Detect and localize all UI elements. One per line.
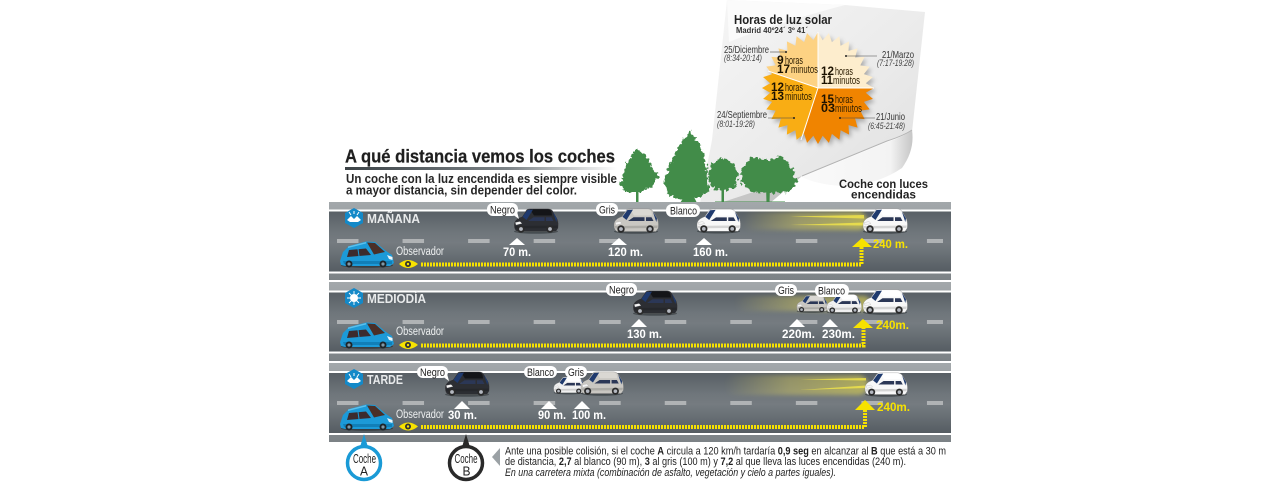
car: lights on: [863, 209, 908, 234]
label bubble: gris: Gris: [599, 204, 615, 216]
sector label: invierno 9 horas 17 minutos: 17: [777, 62, 790, 76]
sector label: invierno 9 horas 17 minutos: minutos: [791, 64, 818, 76]
label: observador: Observador: [396, 246, 444, 258]
marker 220 m: 220m.: [782, 327, 815, 341]
date label: 24 septiembre: 24/Septiembre: [717, 109, 767, 121]
text block: collision note: En una carretera mixta (combinación de asfalto, vegetación y cielo a partes iguales).: [505, 467, 836, 479]
marker 120 m: [608, 238, 643, 259]
marker 100 m: 100 m.: [572, 408, 606, 422]
sector label: otoño 12 horas 13 minutos: 12: [771, 80, 784, 94]
sector label: verano 15 horas 03 minutos: horas: [835, 94, 853, 106]
sector label: otoño 12 horas 13 minutos: [771, 80, 812, 103]
callout: coche A: [348, 434, 380, 480]
chart: sun hours by season: [762, 32, 876, 147]
heading: horas de luz solar: Madrid 40º24´ 3º 41´: [736, 26, 808, 35]
label bubble: blanco: Blanco: [670, 206, 697, 218]
callout: coche B: [450, 434, 482, 480]
car: white: [554, 377, 585, 394]
sector label: primavera 12 horas 11 minutos: horas: [835, 66, 853, 78]
callout: coche B: Coche: [454, 451, 478, 466]
subtitle: [346, 172, 617, 198]
arrow: pointer to note: [492, 448, 500, 466]
sector label: invierno 9 horas 17 minutos: horas: [785, 55, 803, 67]
sector label: invierno 9 horas 17 minutos: [777, 53, 818, 76]
sector label: otoño 12 horas 13 minutos: 13: [771, 89, 784, 103]
marker 160 m: [693, 238, 728, 259]
marker 70 m: [503, 238, 531, 259]
icon: eye: [399, 341, 418, 349]
marker 30 m: 30 m.: [448, 408, 477, 422]
sector label: invierno 9 horas 17 minutos: 9: [777, 53, 784, 67]
paper sheet with curled corner: [700, 0, 925, 203]
date label: 21 marzo: [845, 49, 914, 68]
headlight beam: [725, 375, 868, 395]
car: grey: [614, 209, 659, 234]
date label: 21 junio: 21/Junio: [876, 111, 905, 123]
sector label: primavera 12 horas 11 minutos: 11: [821, 73, 833, 87]
marker 130 m: 130 m.: [627, 327, 662, 341]
subtitle: a mayor distancia, sin depender del color.: [346, 184, 577, 198]
title underline: [345, 167, 617, 170]
sector label: verano 15 horas 03 minutos: [821, 92, 862, 115]
distance arrow 240 m: [421, 318, 909, 346]
panel: road tarde: [329, 363, 951, 442]
marker 120 m: 120 m.: [608, 245, 643, 259]
date label: 21 marzo: (7:17-19:28): [877, 58, 914, 68]
text block: collision note: Ante una posible colisión, si el coche A circula a 120 km/h tardaría 0,9 seg en alcanzar al B que está a 30 m: [505, 446, 946, 458]
sector label: primavera 12 horas 11 minutos: 12: [821, 64, 834, 78]
car: lights on: [863, 290, 908, 315]
label bubble: negro: [487, 203, 519, 219]
marker 130 m: [627, 319, 662, 341]
marker 230 m: 230m.: [822, 327, 855, 341]
date label: 21 junio: (6:45-21:48): [868, 121, 905, 131]
marker 70 m: 70 m.: [503, 245, 531, 259]
car: lights on: [865, 373, 908, 397]
distance arrow 240 m: 240m.: [877, 400, 910, 414]
car A: observer: [340, 404, 394, 431]
trees: [620, 131, 797, 204]
headlight beam: [742, 212, 867, 230]
label: coche con luces encendidas: [839, 177, 928, 202]
sector label: otoño 12 horas 13 minutos: horas: [785, 82, 803, 94]
label: observador: Observador: [396, 409, 444, 421]
date label: 25 diciembre: 25/Diciembre: [724, 44, 769, 56]
marker 90 m: 90 m.: [538, 408, 566, 422]
label bubble: gris: Gris: [568, 367, 584, 379]
callout: coche A: A: [360, 464, 368, 478]
car: black: [445, 372, 490, 397]
marker 160 m: 160 m.: [693, 245, 728, 259]
label: mañana: MAÑANA: [367, 211, 421, 226]
heading: horas de luz solar: Horas de luz solar: [734, 13, 832, 27]
car: black: [633, 291, 678, 316]
distance arrow 240 m: 240m.: [876, 318, 909, 332]
marker 230 m: [822, 319, 855, 341]
date label: 24 septiembre: [717, 109, 795, 129]
date label: 25 diciembre: (8:34-20:14): [724, 53, 762, 63]
car: grey: [797, 296, 828, 313]
icon: eye: [399, 422, 418, 430]
label: coche con luces encendidas: encendidas: [851, 188, 916, 202]
label bubble: blanco: Blanco: [527, 367, 554, 379]
sector label: otoño 12 horas 13 minutos: minutos: [785, 91, 812, 103]
car A: observer: [340, 322, 394, 349]
marker 220 m: [782, 319, 815, 341]
time of day icon: noon: [345, 288, 363, 308]
date label: 24 septiembre: (8:01-19:28): [717, 119, 755, 129]
sector label: verano 15 horas 03 minutos: 03: [821, 101, 835, 115]
distance arrow 240 m: 240 m.: [873, 237, 908, 251]
time of day icon: morning: [345, 208, 363, 228]
car A: observer: [340, 242, 394, 268]
sector label: verano 15 horas 03 minutos: minutos: [835, 103, 862, 115]
car: white: [827, 294, 862, 314]
icon: eye: [399, 260, 418, 268]
label bubble: blanco: Blanco: [818, 286, 845, 298]
title: A qué distancia vemos los coches: [345, 146, 615, 166]
subtitle: Un coche con la luz encendida es siempre visible: [346, 172, 617, 186]
label bubble: negro: Negro: [420, 367, 445, 379]
label: tarde: TARDE: [367, 372, 403, 387]
label bubble: negro: Negro: [609, 284, 634, 296]
text block: collision note: de distancia, 2,7 al blanco (90 m), 3 al gris (100 m) y 7,2 al que lleva las luces encendidas (240 m).: [505, 456, 906, 468]
distance arrow 240 m: [421, 400, 910, 427]
marker 90 m: [538, 401, 566, 422]
callout: coche B: B: [462, 464, 470, 478]
label: coche con luces encendidas: Coche con luces: [839, 177, 928, 191]
car: black: [514, 209, 559, 234]
marker 30 m: [448, 401, 477, 422]
sector label: primavera 12 horas 11 minutos: minutos: [833, 75, 860, 87]
marker 100 m: [572, 401, 606, 422]
distance arrow 240 m: [421, 237, 908, 264]
date label: 21 junio: [839, 111, 905, 131]
panel: road mañana: [329, 202, 951, 280]
heading: horas de luz solar: [734, 13, 832, 35]
callout: coche A: Coche: [353, 451, 376, 466]
date label: 21 marzo: 21/Marzo: [882, 49, 914, 61]
sector label: primavera 12 horas 11 minutos: [821, 64, 860, 87]
car: grey: [581, 372, 624, 396]
text block: collision note: [505, 446, 946, 479]
panel: road mediodía: [329, 282, 951, 361]
time of day icon: afternoon: [345, 369, 363, 389]
sector label: verano 15 horas 03 minutos: 15: [821, 92, 834, 106]
label: mediodía: MEDIODÍA: [367, 291, 427, 306]
label bubble: gris: Gris: [778, 285, 794, 297]
headlight beam: [735, 296, 870, 311]
label bubble: negro: Negro: [490, 204, 515, 216]
car: white: [697, 209, 741, 234]
date label: 25 diciembre: [724, 44, 787, 63]
label: observador: Observador: [396, 326, 444, 338]
